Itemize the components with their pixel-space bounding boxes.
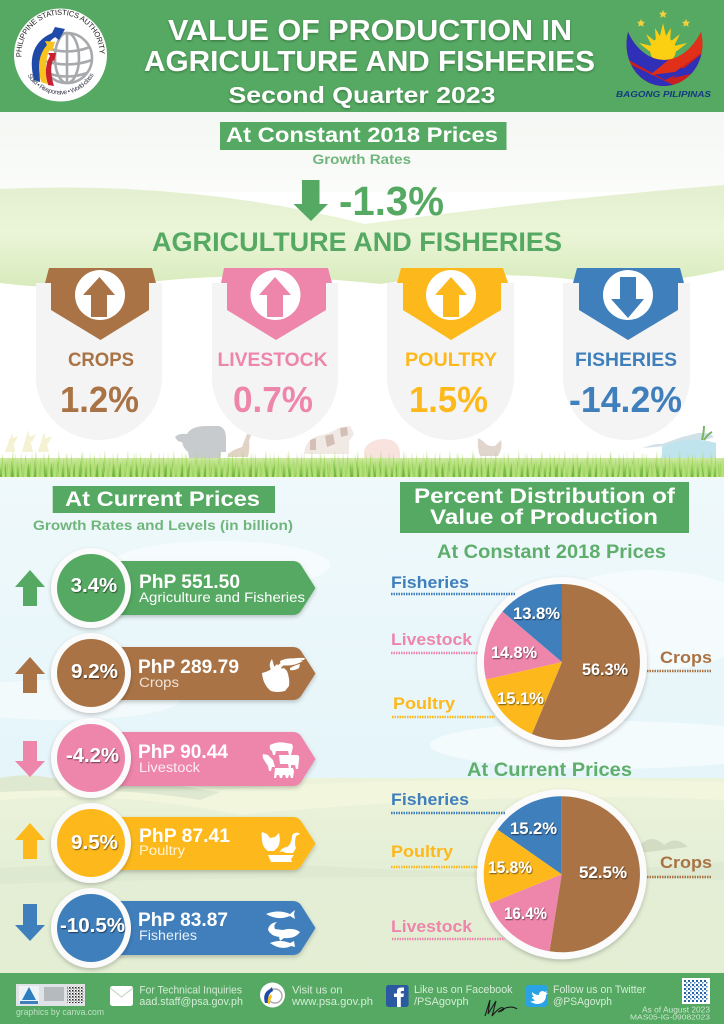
icon: envelope [110, 986, 133, 1006]
icon: wheat and sack [262, 658, 305, 692]
footer band [0, 973, 724, 1024]
panel: fisheries [563, 268, 690, 440]
icon: faded spotted cow [304, 426, 354, 454]
icon: QR code [682, 978, 710, 1004]
icon: down arrow [15, 904, 45, 941]
panel: livestock: 0.7% [233, 379, 313, 420]
legend: constant prices labels: Livestock [391, 630, 473, 649]
icon: fisheries badge [573, 268, 684, 340]
icon: faded cow [175, 426, 226, 462]
icon: faded corn [5, 430, 52, 452]
row: fisheries [15, 888, 316, 968]
panel: fisheries: FISHERIES [575, 349, 677, 371]
icon: up arrow [15, 823, 45, 859]
row: agriculture and fisheries: Agriculture and Fisheries [139, 590, 305, 605]
text: graphics credit: graphics by canva.com [16, 1007, 104, 1017]
pie chart: constant 2018 prices: 14.8% [491, 643, 537, 662]
panel: poultry: POULTRY [405, 349, 497, 371]
header band [0, 0, 724, 112]
panel: livestock [212, 268, 338, 440]
title [144, 15, 595, 108]
icon: PSA logo: PHILIPPINE STATISTICS AUTHORITY [16, 10, 105, 57]
heading: at constant 2018 prices [220, 122, 506, 150]
subheading: constant prices pie: At Constant 2018 Prices [437, 542, 666, 563]
heading: at constant 2018 prices: At Constant 2018 Prices [226, 124, 498, 147]
icon: PSA logo [14, 8, 107, 102]
text: facebook [414, 984, 513, 1008]
row: livestock: -4.2% [66, 745, 119, 767]
icon: down arrow [294, 180, 328, 221]
heading: at current prices: At Current Prices [65, 488, 260, 511]
pie chart: constant 2018 prices: 15.1% [497, 689, 544, 708]
panel: livestock: LIVESTOCK [218, 349, 328, 371]
legend: current prices labels: Fisheries [391, 790, 469, 809]
farm animals silhouettes [5, 426, 716, 475]
icon: poultry badge [397, 268, 508, 340]
pie chart: constant 2018 prices: 56.3% [582, 660, 628, 679]
legend: current prices labels: Crops [660, 853, 712, 872]
icon: PSA logo: Solid • Responsive • World-class [28, 74, 94, 94]
icon: faded pig [364, 439, 400, 458]
title: VALUE OF PRODUCTION IN [168, 15, 572, 47]
icon: fish [266, 910, 300, 948]
row: crops: PhP 289.79 [138, 657, 239, 678]
pie chart: current prices: 15.2% [510, 819, 557, 838]
legend: current prices labels: Poultry [391, 842, 454, 861]
upper background [0, 112, 724, 478]
icon: Bagong Pilipinas logo [616, 10, 711, 99]
pie chart: constant 2018 prices: 13.8% [513, 604, 560, 623]
icon: crops badge [45, 268, 156, 340]
title: AGRICULTURE AND FISHERIES [144, 46, 595, 78]
panel: fisheries: -14.2% [569, 379, 682, 420]
heading: percent distribution [400, 482, 689, 533]
row: crops: Crops [139, 675, 179, 690]
row: agriculture and fisheries: PhP 551.50 [139, 572, 240, 593]
text: website [291, 984, 373, 1008]
text: technical inquiries: aad.staff@psa.gov.ph [139, 996, 243, 1008]
heading: at current prices [53, 486, 275, 513]
lower background [0, 478, 724, 974]
row: fisheries: Fisheries [139, 928, 197, 943]
pie chart: current prices: 16.4% [504, 904, 547, 923]
heading: percent distribution: Percent Distribution of [414, 484, 676, 508]
icon: certification badge [16, 984, 85, 1006]
row: livestock: PhP 90.44 [138, 742, 228, 763]
subheading: current prices pie: At Current Prices [467, 760, 632, 781]
row: poultry [15, 803, 316, 883]
signature [485, 1000, 517, 1016]
text: technical inquiries [139, 984, 243, 1008]
headline figure: agriculture and fisheries: -1.3% [339, 178, 444, 224]
text: website: www.psa.gov.ph [291, 996, 373, 1008]
text: technical inquiries: For Technical Inquiries [139, 984, 242, 996]
legend: constant prices labels: Crops [660, 648, 712, 667]
icon: faded hen [478, 438, 502, 456]
icon: faded fish and water [642, 426, 716, 475]
headline figure: agriculture and fisheries [152, 178, 562, 257]
row: agriculture and fisheries [15, 548, 316, 628]
text: twitter [553, 984, 646, 1008]
panel: poultry [387, 268, 514, 440]
headline figure: agriculture and fisheries: AGRICULTURE AND FISHERIES [152, 227, 562, 257]
title: Second Quarter 2023 [228, 82, 496, 108]
text: website: Visit us on [292, 984, 342, 996]
row: poultry: 9.5% [71, 832, 118, 854]
legend: constant prices labels [391, 573, 712, 717]
pie chart: current prices: 15.8% [488, 858, 532, 877]
legend: current prices labels: Livestock [391, 917, 473, 936]
text: facebook: Like us on Facebook [414, 984, 513, 996]
panel: crops [36, 268, 162, 440]
row: livestock: Livestock [139, 760, 200, 775]
text: document date and code: As of August 2023 [642, 1006, 711, 1014]
text: twitter: Follow us on Twitter [553, 984, 646, 996]
row: agriculture and fisheries: 3.4% [71, 575, 117, 597]
text: facebook: /PSAgovph [414, 996, 469, 1008]
pie chart: constant 2018 prices [477, 577, 647, 747]
icon: livestock badge [221, 268, 332, 340]
pie chart: current prices: 52.5% [579, 863, 627, 882]
icon: down arrow [15, 741, 45, 777]
row: crops: 9.2% [71, 661, 118, 683]
panel: poultry: 1.5% [409, 379, 488, 420]
icon: small PSA logo [260, 982, 285, 1008]
text: twitter: @PSAgovph [553, 996, 612, 1008]
row: fisheries: -10.5% [60, 915, 125, 937]
grass strip [0, 449, 724, 479]
icon: twitter [526, 985, 548, 1007]
row: poultry: Poultry [139, 843, 185, 858]
row: fisheries: PhP 83.87 [138, 910, 228, 931]
row: crops [15, 633, 316, 713]
text: document date and code [630, 1006, 711, 1022]
text: document date and code: MAS05-IG-09082023 [630, 1012, 710, 1022]
icon: farm animals [263, 742, 299, 778]
heading: percent distribution: Value of Production [430, 505, 658, 529]
icon: up arrow [15, 570, 45, 606]
icon: Bagong Pilipinas logo: BAGONG PILIPINAS [616, 89, 711, 99]
subheading: growth rates: Growth Rates [312, 152, 411, 167]
panel: crops: 1.2% [60, 379, 139, 420]
icon: hen and duck [262, 832, 300, 862]
subheading: growth rates and levels: Growth Rates and Levels (in billion) [33, 517, 293, 533]
row: livestock [15, 718, 316, 798]
legend: constant prices labels: Poultry [393, 694, 456, 713]
panel: crops: CROPS [68, 349, 134, 371]
row: poultry: PhP 87.41 [139, 826, 230, 847]
pie chart: current prices [477, 789, 647, 959]
icon: up arrow [15, 657, 45, 693]
legend: current prices labels [391, 790, 712, 939]
icon: facebook [386, 985, 409, 1007]
legend: constant prices labels: Fisheries [391, 573, 469, 592]
icon: faded goat [228, 434, 251, 457]
